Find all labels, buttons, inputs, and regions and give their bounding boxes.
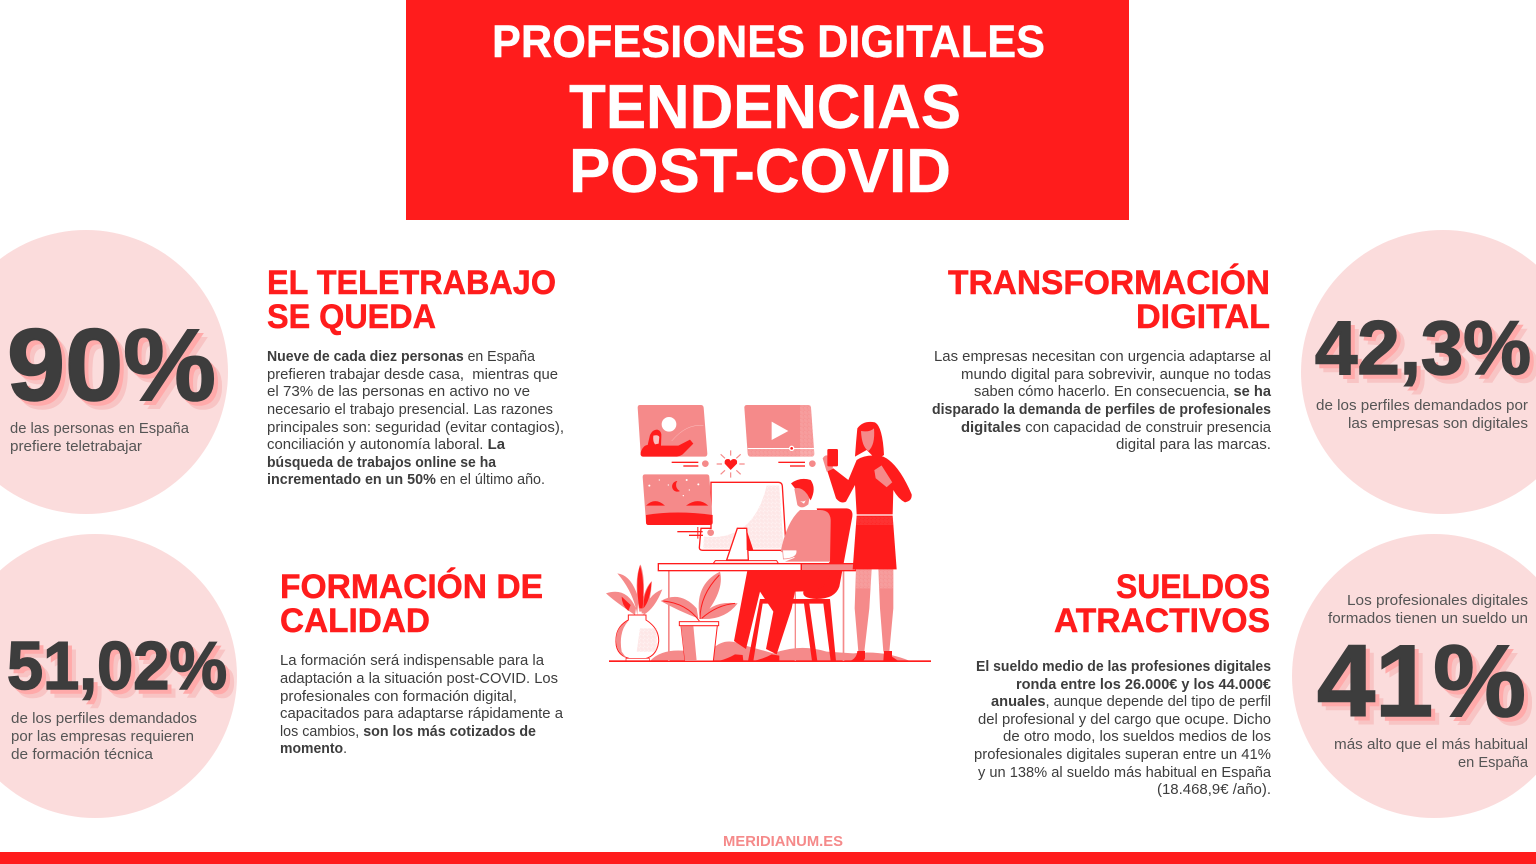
stat caption: bottom: en España [1458, 755, 1529, 771]
text block: teletrabajo: necesario el trabajo presencial. Las razones [267, 402, 553, 418]
text block: teletrabajo: conciliación y autonomía laboral. La [267, 437, 506, 453]
title line: tendencias: TENDENCIAS [569, 73, 961, 142]
text block: formación [280, 653, 564, 757]
text block: sueldos: (18.468,9€ /año). [1157, 782, 1271, 798]
stat caption: las empresas son digitales [1348, 416, 1528, 432]
icon: heart with rays [717, 450, 745, 478]
text block: sueldos: profesionales digitales superan entre un 41% [974, 747, 1271, 763]
legs [734, 571, 833, 654]
footer credit: MERIDIANUM.ES [723, 834, 843, 850]
stat circle: 41% [1292, 534, 1536, 818]
heading: sueldos atractivos: ATRACTIVOS [1054, 602, 1270, 640]
man sitting [719, 479, 833, 661]
text block: sueldos [974, 659, 1272, 798]
text block: sueldos: anuales, aunque depende del tipo de perfil [991, 694, 1271, 710]
text block: teletrabajo: Nueve de cada diez personas en España [267, 349, 536, 365]
illustration: people working at a desk with digital content [606, 405, 931, 662]
stat caption [11, 711, 197, 763]
text block: teletrabajo: el 73% de las personas en activo no ve [267, 384, 530, 400]
text block: formación: los cambios, son los más cotizados de [280, 724, 536, 740]
heading: el teletrabajo se queda: EL TELETRABAJO [267, 264, 556, 302]
text block: teletrabajo: incrementado en un 50% en el último año. [267, 472, 545, 488]
card: video call [638, 405, 709, 467]
title line: profesiones digitales: PROFESIONES DIGITALES [492, 16, 1045, 67]
stat caption: de los perfiles demandados [11, 711, 197, 727]
text block: sueldos: El sueldo medio de las profesiones digitales [976, 659, 1271, 675]
stat circle: 41%: 41% [1325, 632, 1534, 746]
office chair [748, 508, 852, 661]
stat circle: 90% [0, 230, 228, 514]
plant: vase with leaves [606, 564, 662, 661]
text block: sueldos: y un 138% al sueldo más habitual en España [978, 765, 1272, 781]
monitor [699, 482, 786, 560]
text block: teletrabajo: principales son: seguridad (evitar contagios), [267, 420, 564, 436]
text block: formación: adaptación a la situación post-COVID. Los [280, 671, 558, 687]
heading: formación de calidad [280, 568, 543, 640]
desk legs [668, 571, 844, 661]
stat caption: de las personas en España [10, 421, 190, 437]
stat circle: 51,02%: 51,02% [15, 636, 235, 712]
title banner [406, 0, 1129, 220]
stat caption: top [1328, 593, 1528, 627]
heading: transformación digital [948, 264, 1270, 336]
stat circle: 42,3%: 42,3% [1323, 314, 1536, 399]
stat caption: por las empresas requieren [11, 729, 194, 745]
stat circle: 42,3%: 42,3% [1315, 306, 1531, 391]
heading: formación de calidad: FORMACIÓN DE [280, 568, 543, 606]
head [794, 487, 811, 507]
heading: transformación digital: TRANSFORMACIÓN [948, 264, 1270, 302]
text block: teletrabajo: prefieren trabajar desde casa, mientras que [267, 367, 558, 383]
text block: sueldos: de otro modo, los sueldos medios de los [1003, 729, 1271, 745]
heading: el teletrabajo se queda: SE QUEDA [267, 298, 436, 336]
legs [855, 569, 893, 652]
text block: transformación digital: digital para las marcas. [1116, 437, 1271, 453]
heading: formación de calidad: CALIDAD [280, 602, 430, 640]
text block: teletrabajo [267, 349, 564, 488]
stat circle: 51,02% [0, 534, 237, 818]
heading: sueldos atractivos: SUELDOS [1116, 568, 1270, 606]
stat caption [1316, 398, 1528, 432]
stat caption: bottom: más alto que el más habitual [1334, 737, 1528, 753]
heading: sueldos atractivos [1054, 568, 1270, 640]
text block: formación: capacitados para adaptarse rápidamente a [280, 706, 564, 722]
heading: el teletrabajo se queda [267, 264, 556, 336]
text block: transformación digital: digitales con capacidad de construir presencia [961, 420, 1272, 436]
stat caption [10, 421, 190, 455]
stat caption: top: Los profesionales digitales [1347, 593, 1528, 609]
stat circle: 51,02%: 51,02% [11, 632, 231, 708]
stat circle: 41%: 41% [1317, 624, 1526, 738]
text block: transformación digital: disparado la demanda de perfiles de profesionales [932, 402, 1271, 418]
footer bar [0, 852, 1536, 864]
stat circle: 90%: 90% [15, 316, 224, 430]
stat caption: prefiere teletrabajar [10, 439, 142, 455]
text block: teletrabajo: búsqueda de trabajos online se ha [267, 455, 497, 471]
ground [609, 642, 931, 662]
stat circle: 42,3% [1301, 230, 1536, 514]
text block: transformación digital [932, 349, 1272, 453]
text block: transformación digital: Las empresas necesitan con urgencia adaptarse al [934, 349, 1271, 365]
text block: formación: momento. [280, 741, 347, 757]
text block: transformación digital: mundo digital para sobrevivir, aunque no todas [961, 367, 1271, 383]
stat circle: 90%: 90% [7, 308, 216, 422]
text block: sueldos: ronda entre los 26.000€ y los 44.000€ [1016, 677, 1271, 693]
text block: formación: profesionales con formación digital, [280, 689, 517, 705]
stat circle: 51,02%: 51,02% [7, 628, 227, 704]
stat circle: 41%: 41% [1321, 628, 1530, 742]
hair [855, 422, 884, 460]
stat caption: bottom [1334, 737, 1529, 771]
stat circle: 42,3%: 42,3% [1319, 310, 1535, 395]
desk top [658, 561, 856, 571]
text block: formación: La formación será indispensable para la [280, 653, 545, 669]
stat circle: 90%: 90% [11, 312, 220, 426]
woman standing [823, 422, 912, 661]
stat caption: de formación técnica [11, 747, 154, 763]
plant: pot with leaves [661, 572, 738, 661]
heading: transformación digital: DIGITAL [1136, 298, 1270, 336]
card: night landscape [643, 474, 714, 539]
text block: transformación digital: saben cómo hacerlo. En consecuencia, se ha [974, 384, 1272, 400]
top and arms [827, 456, 912, 514]
text block: sueldos: del profesional y del cargo que ocupe. Dicho [978, 712, 1271, 728]
face [861, 428, 874, 451]
title line: post-covid: POST-COVID [569, 137, 951, 206]
stat caption: de los perfiles demandados por [1316, 398, 1528, 414]
card: video player [744, 405, 816, 467]
skirt [853, 516, 897, 569]
stat caption: top: formados tienen un sueldo un [1328, 611, 1528, 627]
